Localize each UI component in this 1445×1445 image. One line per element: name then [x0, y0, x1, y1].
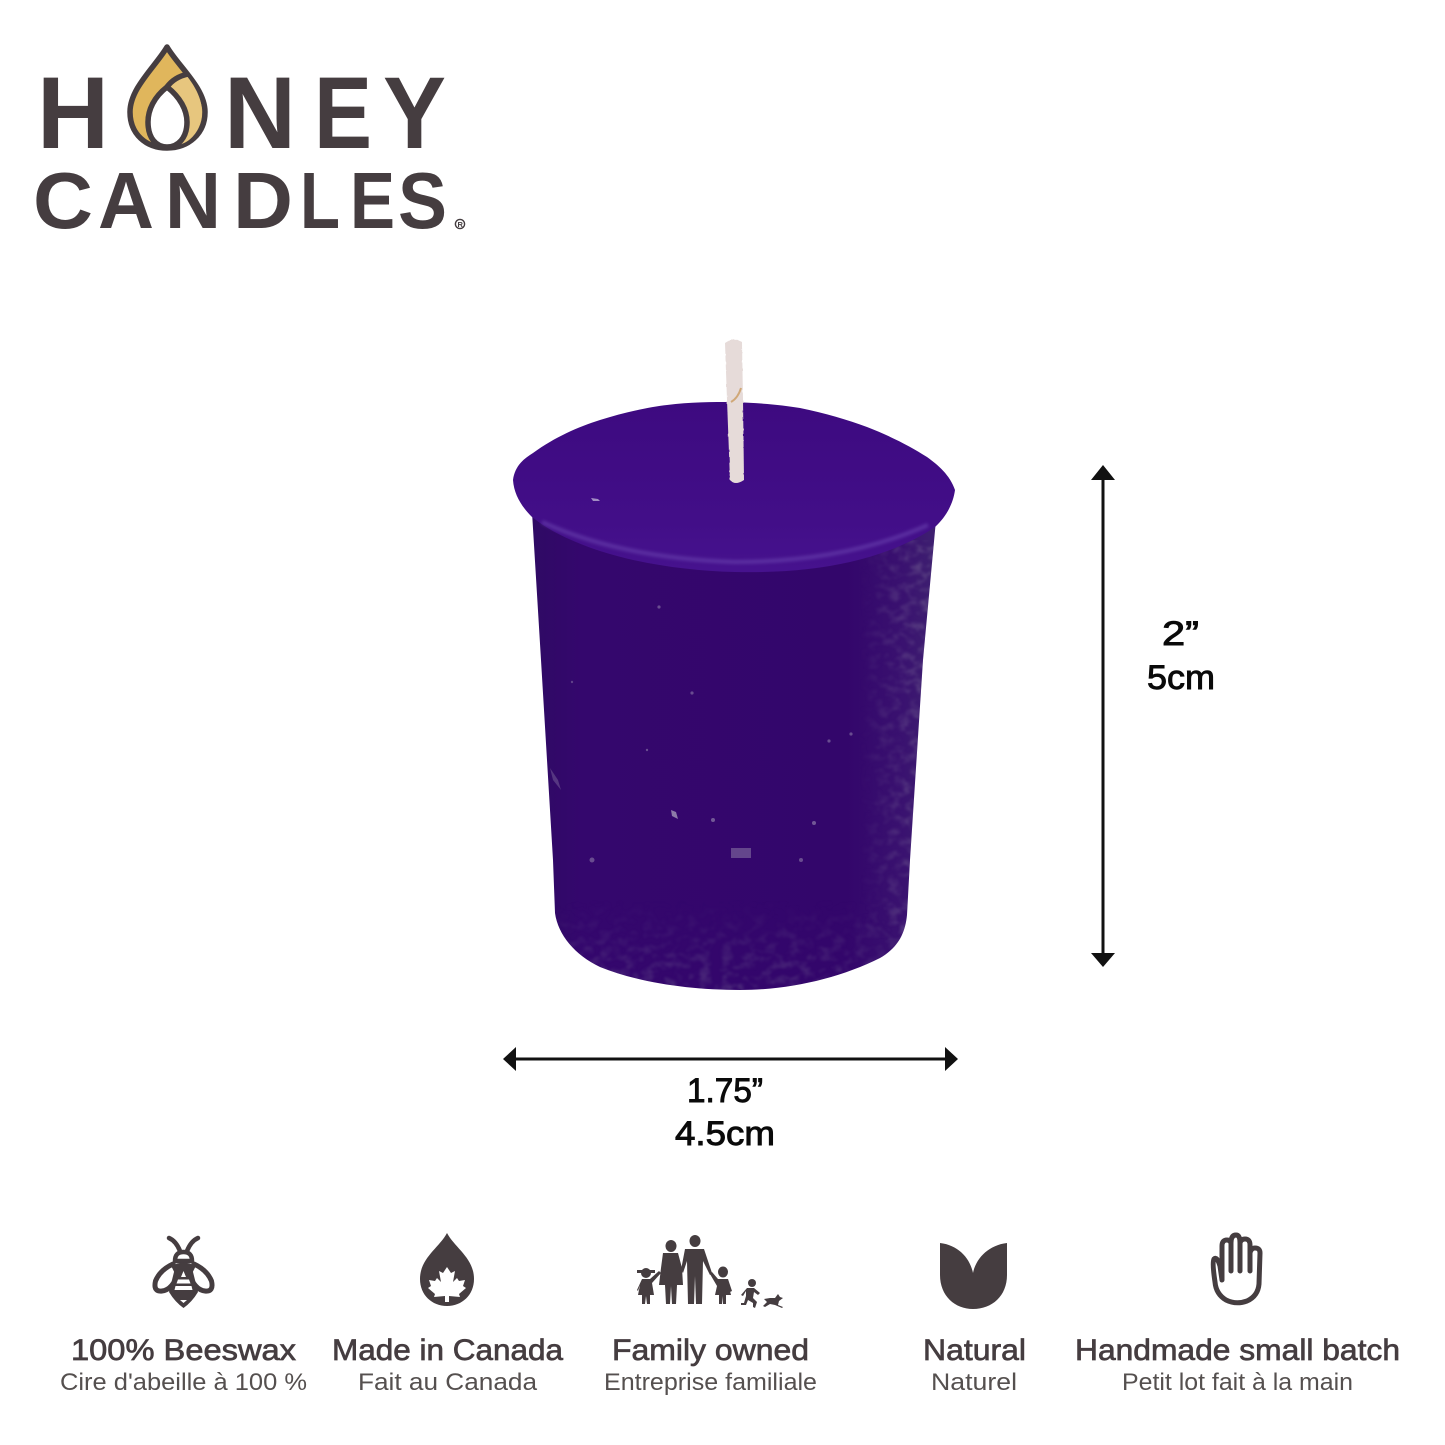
logo word: CANDLES: N	[165, 156, 221, 245]
logo word: HONEY: H	[37, 56, 109, 170]
height label: 2”	[1162, 615, 1199, 653]
height label: 5cm	[1147, 659, 1215, 697]
French label: Petit lot fait à la main	[1122, 1369, 1353, 1396]
logo: Honey Candles	[33, 47, 465, 245]
registered mark	[455, 219, 465, 229]
logo word: CANDLES: L	[300, 156, 340, 245]
wax speckles	[550, 605, 853, 862]
logo word: HONEY: N	[224, 56, 296, 170]
French label: Fait au Canada	[358, 1369, 538, 1396]
logo word: CANDLES	[33, 156, 447, 245]
width arrow	[503, 1047, 958, 1071]
logo word: CANDLES: A	[98, 156, 154, 245]
logo word: CANDLES: E	[350, 156, 395, 245]
icon: tulip leaf	[940, 1243, 1007, 1309]
logo word: HONEY	[37, 56, 446, 170]
candle top rim	[513, 402, 955, 572]
logo word: HONEY: Y	[383, 56, 446, 170]
label: Natural	[923, 1334, 1026, 1367]
icon: bee	[155, 1238, 212, 1308]
width label: 4.5cm	[675, 1115, 775, 1153]
icon: drop with maple leaf	[420, 1233, 474, 1306]
feature: Family owned	[604, 1235, 817, 1396]
feature: Handmade small batch	[1075, 1235, 1400, 1396]
label: Family owned	[612, 1334, 809, 1367]
feature: Made in Canada	[332, 1233, 563, 1396]
logo word: CANDLES: S	[398, 156, 447, 245]
candle photo	[513, 340, 955, 995]
logo icon: honey flame drop	[130, 47, 205, 148]
French label: Entreprise familiale	[604, 1369, 817, 1396]
label: 100% Beeswax	[71, 1334, 296, 1367]
height label	[1147, 615, 1215, 697]
candle wick	[725, 340, 744, 483]
feature: 100% Beeswax	[60, 1238, 307, 1396]
French label: Cire d'abeille à 100 %	[60, 1369, 307, 1396]
icon: family	[637, 1235, 783, 1308]
label: Handmade small batch	[1075, 1334, 1400, 1367]
logo word: CANDLES: D	[233, 156, 293, 245]
registered mark: R	[458, 220, 464, 229]
French label: Naturel	[931, 1369, 1017, 1396]
feature: Natural	[923, 1243, 1026, 1396]
icon: hand	[1213, 1235, 1260, 1303]
logo word: HONEY: E	[314, 56, 372, 170]
width label	[675, 1072, 775, 1153]
candle body	[532, 512, 940, 995]
logo word: CANDLES: C	[33, 156, 93, 245]
width label: 1.75”	[687, 1072, 763, 1110]
height arrow	[1091, 465, 1115, 967]
label: Made in Canada	[332, 1334, 563, 1367]
